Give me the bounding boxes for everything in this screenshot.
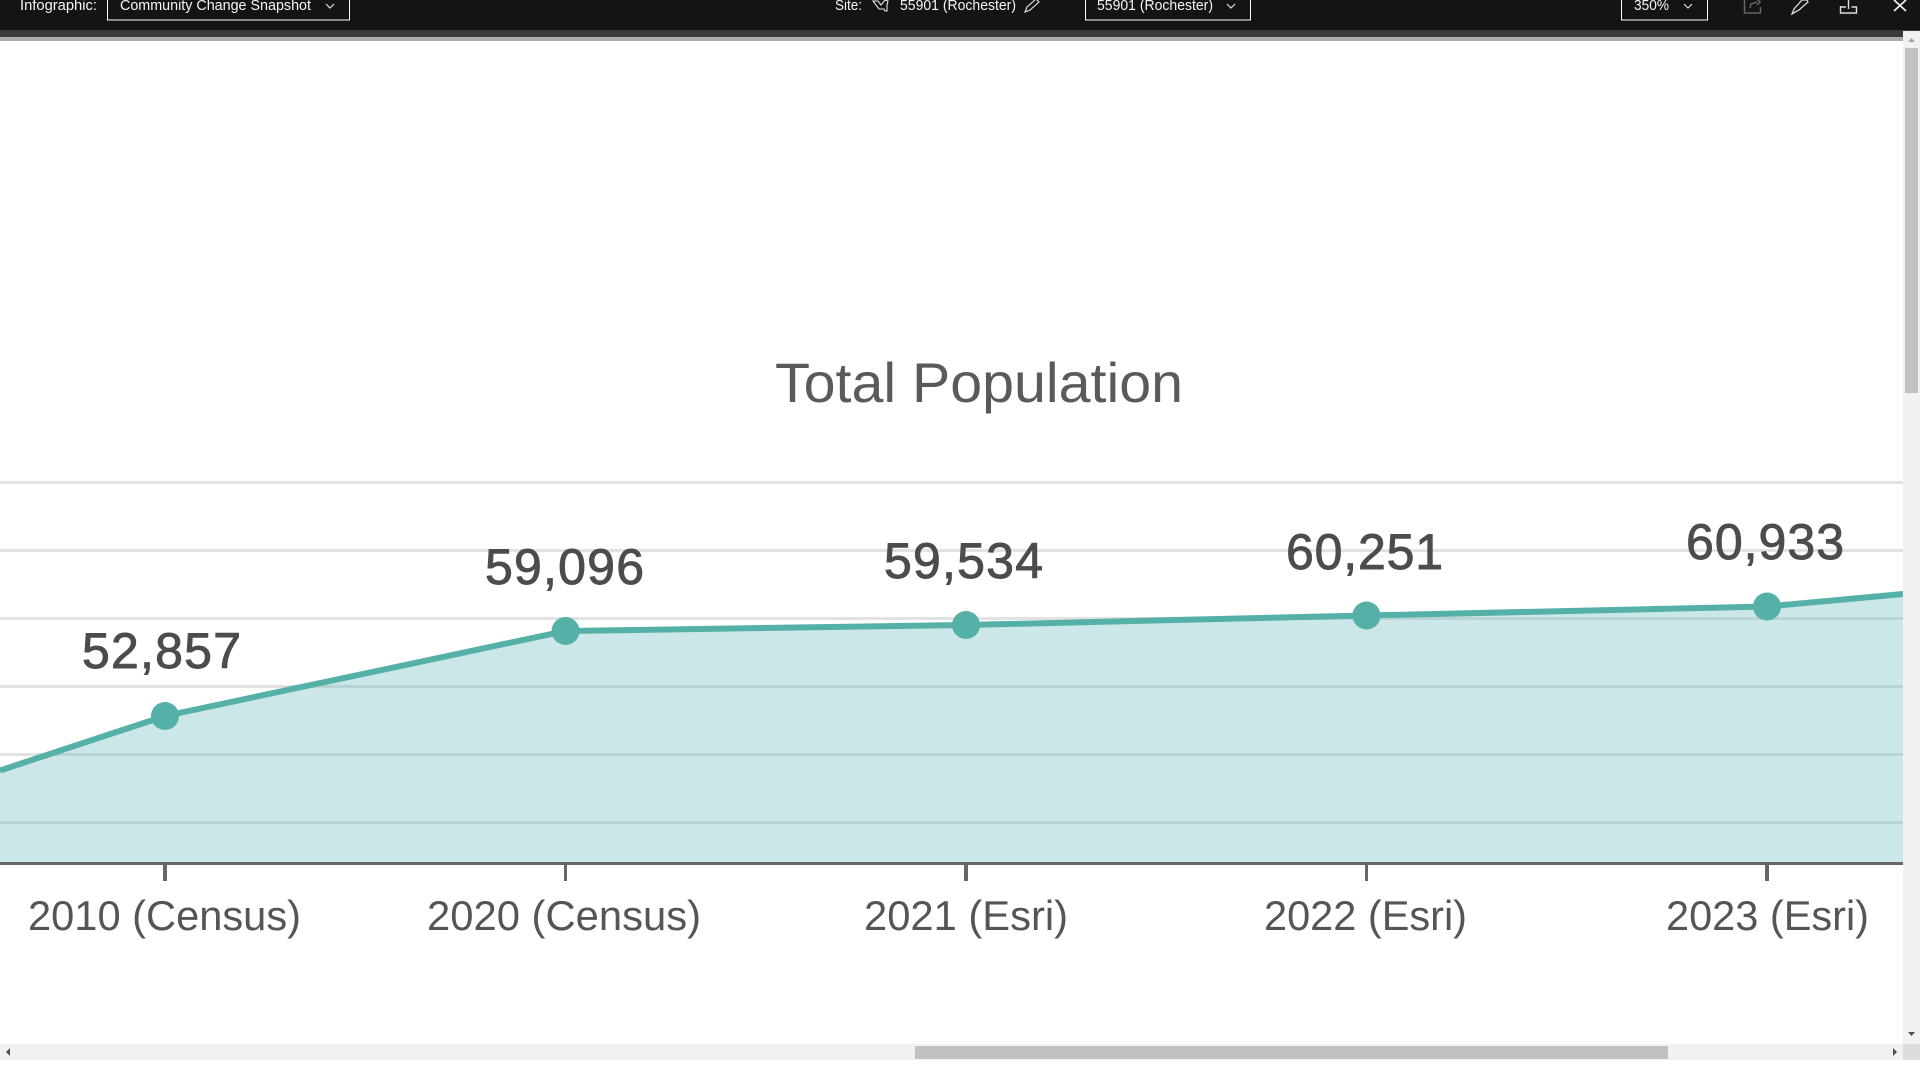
chart: total population area line	[0, 482, 1903, 939]
icon: close	[1894, 0, 1906, 11]
zoom dropdown	[1622, 0, 1708, 20]
data point 2020: 59,096	[485, 539, 644, 595]
data point 2021	[884, 533, 1043, 639]
x axis	[0, 862, 1903, 881]
data point 2022: 60,251	[1286, 524, 1443, 580]
icon: site polygon	[873, 0, 888, 11]
top toolbar	[0, 0, 1920, 41]
data point 2010	[82, 623, 241, 730]
site dropdown	[1086, 0, 1250, 20]
vertical scrollbar	[1903, 31, 1920, 1044]
data point 2020	[485, 539, 644, 645]
x axis labels: 2022 (Esri)	[1264, 892, 1467, 939]
x axis labels	[28, 892, 1869, 939]
data point 2010: 52,857	[82, 623, 241, 679]
icon: share	[1744, 0, 1760, 13]
infographic dropdown	[108, 0, 350, 20]
x axis labels: 2020 (Census)	[427, 892, 701, 939]
data point 2022	[1286, 524, 1443, 630]
data point 2023	[1686, 514, 1844, 620]
icon: edit pencil	[1025, 0, 1039, 12]
data point 2021: 59,534	[884, 533, 1043, 589]
x axis labels: 2023 (Esri)	[1666, 892, 1869, 939]
icon: edit	[1792, 0, 1808, 14]
horizontal scrollbar	[0, 1044, 1920, 1060]
x axis labels: 2021 (Esri)	[864, 892, 1068, 939]
data point 2023: 60,933	[1686, 514, 1844, 570]
area fill	[0, 594, 1903, 862]
x axis labels: 2010 (Census)	[28, 892, 301, 939]
grid lines	[0, 482, 1903, 822]
chart title: Total Population	[775, 351, 1183, 414]
trend line	[0, 594, 1903, 770]
icon: export	[1840, 0, 1856, 13]
